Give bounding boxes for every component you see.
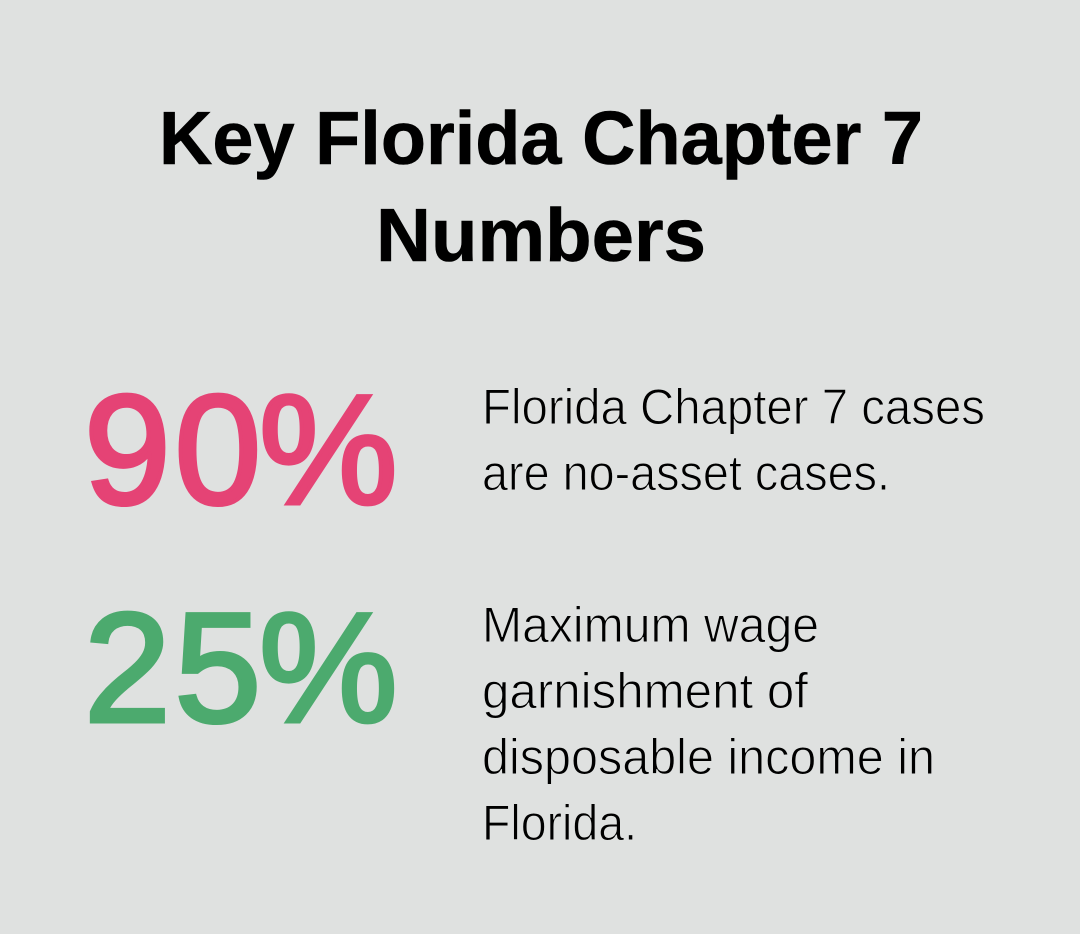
stat description: wage garnishment: Maximum wage [482,597,819,653]
title: Key Florida Chapter 7 [159,96,923,180]
stat description: wage garnishment: Florida. [482,795,637,851]
stat description: wage garnishment: disposable income in [482,729,935,785]
stat description: no-asset cases: Florida Chapter 7 cases [482,379,985,435]
stat description: wage garnishment: garnishment of [482,663,808,719]
stat description: wage garnishment [482,597,935,851]
stat value: 25%: 25% [84,582,398,756]
stat value: 90%: 90% [84,364,398,538]
stat description: no-asset cases: are no-asset cases. [482,445,890,501]
stat: 25% wage garnishment [84,582,935,851]
stat: 90% no-asset cases [84,364,985,538]
title: Numbers [376,193,706,277]
stat description: no-asset cases [482,379,985,501]
title [159,96,923,277]
